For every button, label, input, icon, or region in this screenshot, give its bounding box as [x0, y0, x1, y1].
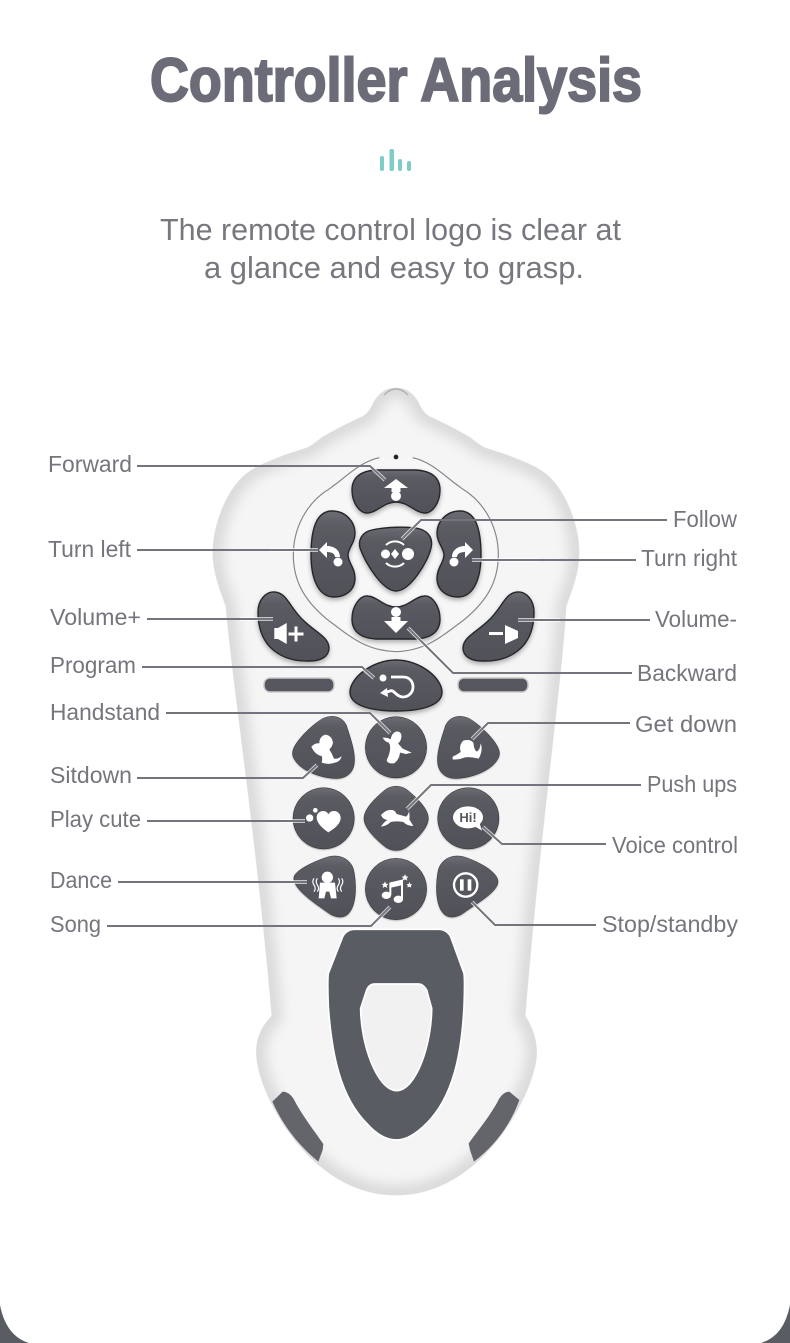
- side grip: right: [469, 1092, 519, 1162]
- label: Sitdown: Sitdown: [50, 762, 132, 788]
- label: Backward: [408, 628, 737, 686]
- label: Song: [50, 907, 390, 937]
- button: dance: [294, 856, 355, 917]
- button: backward: [352, 596, 440, 639]
- side grip: left: [272, 1092, 323, 1162]
- label: Get down: Get down: [635, 711, 737, 737]
- button: turn left: [311, 511, 355, 597]
- label: Backward: Backward: [637, 660, 737, 686]
- slot: right: [458, 678, 528, 692]
- button: voice control: [438, 788, 499, 849]
- title: Controller Analysis: [150, 46, 642, 114]
- battery grip: [328, 929, 464, 1140]
- button: get down: [437, 716, 499, 778]
- slot: left: [264, 678, 334, 692]
- label: Push ups: [407, 771, 737, 809]
- bottom corners: [0, 1305, 790, 1343]
- label: Song: Song: [50, 911, 101, 937]
- button: sit down: [293, 716, 355, 778]
- remote control: [213, 388, 579, 1195]
- label: Volume-: Volume-: [655, 606, 737, 632]
- label: Dance: Dance: [50, 867, 112, 893]
- label: Follow: [402, 506, 737, 539]
- button: turn right: [437, 511, 481, 597]
- label: Handstand: Handstand: [50, 699, 160, 725]
- label: Program: Program: [50, 652, 136, 678]
- subtitle: a glance and easy to grasp.: [204, 250, 584, 285]
- label: Voice control: [483, 827, 738, 858]
- button: volume up: [258, 592, 329, 661]
- remote body: [213, 388, 579, 1195]
- label: Handstand: [50, 699, 390, 733]
- label: Volume+: Volume+: [50, 604, 141, 630]
- button: forward: [352, 470, 440, 513]
- button: volume down: [463, 592, 534, 661]
- label: Get down: [472, 711, 737, 739]
- button: stop: [437, 856, 498, 917]
- label: Turn right: Turn right: [641, 545, 738, 571]
- button: push ups: [364, 786, 428, 850]
- label: Turn left: Turn left: [48, 536, 132, 562]
- label: Program: [50, 652, 374, 678]
- button: follow: [360, 527, 432, 591]
- label: Forward: Forward: [48, 451, 132, 477]
- subtitle: [160, 212, 621, 285]
- label: Follow: Follow: [673, 506, 737, 532]
- icon: teal sound bars: [380, 149, 411, 171]
- label: Play cute: Play cute: [50, 806, 141, 832]
- button grid: [293, 716, 499, 920]
- label: Stop/standby: [472, 902, 739, 937]
- label: Forward: [48, 451, 385, 480]
- button: program: [350, 660, 442, 711]
- label: Push ups: Push ups: [647, 771, 737, 797]
- label: Voice control: Voice control: [612, 832, 738, 858]
- button: song: [365, 858, 427, 920]
- button: handstand: [365, 717, 427, 778]
- d-pad ring: [293, 455, 498, 652]
- subtitle: The remote control logo is clear at: [160, 212, 621, 247]
- button: play cute: [293, 788, 354, 849]
- button: voice control: Hi!: [459, 810, 477, 825]
- label: Sitdown: [50, 762, 317, 788]
- label: Stop/standby: Stop/standby: [602, 911, 739, 937]
